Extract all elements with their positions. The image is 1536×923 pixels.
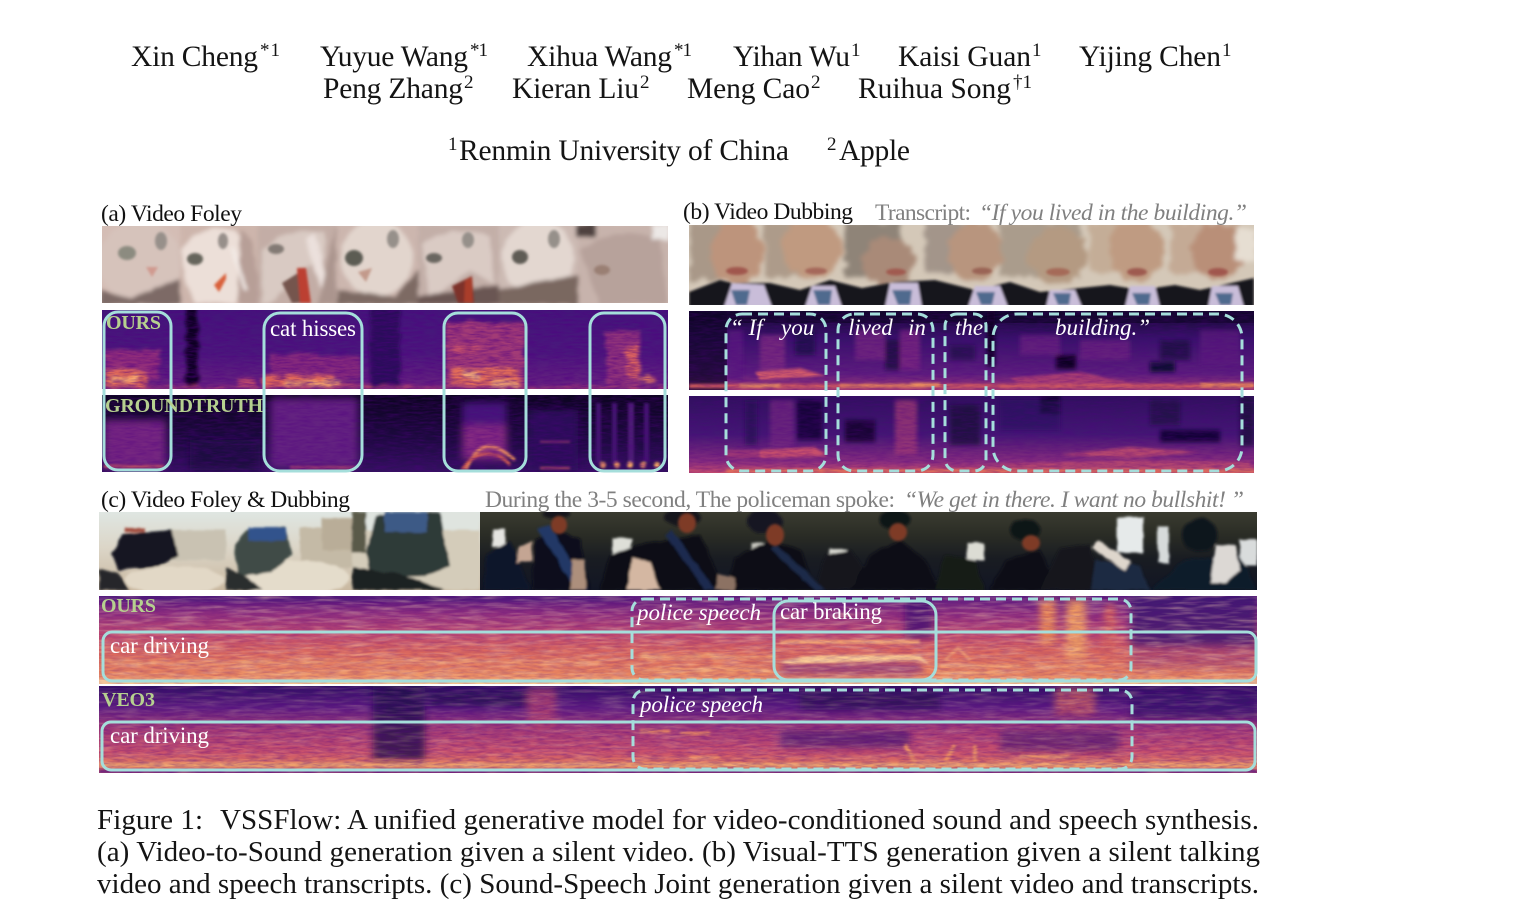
word labels (b): lived <box>848 315 893 340</box>
author row 1: Yijing Chen <box>1079 41 1221 73</box>
author row 1: Xihua Wang <box>527 41 672 73</box>
word labels (b): in <box>908 315 926 340</box>
labels row veo3 <box>102 689 763 748</box>
heading: foley and dubbing: (c) Video Foley & Dubbing <box>101 487 350 513</box>
affiliations: 2 <box>827 134 836 155</box>
word labels (b) <box>730 315 1150 340</box>
author row 1: Kaisi Guan <box>898 41 1031 73</box>
author row 2: 2 <box>640 72 650 93</box>
author row 1: *1 <box>470 40 488 61</box>
spectrogram: ground truth (a) <box>102 395 668 472</box>
author row 2: †1 <box>1013 72 1032 93</box>
author row 2 <box>323 72 1032 105</box>
author row 1: 1 <box>1222 40 1232 61</box>
transcript: “If you lived in the building.” <box>979 200 1247 226</box>
transcript: Transcript: <box>875 200 971 226</box>
labels row ours: car braking <box>780 599 882 624</box>
word labels (b): the <box>955 315 983 340</box>
figure caption: (a) Video-to-Sound generation given a silent video. (b) Visual-TTS generation given a silent talking <box>97 836 1260 868</box>
windows <box>492 530 506 547</box>
affiliations <box>448 134 910 167</box>
author row 1: Yihan Wu <box>733 41 850 73</box>
riders <box>484 540 530 590</box>
author row 1: 1 <box>851 40 860 61</box>
author row 1: Xin Cheng <box>131 41 258 73</box>
labels row ours: car driving <box>110 633 210 658</box>
labels row ours: OURS <box>101 595 156 617</box>
author list <box>131 40 1232 105</box>
helmets <box>542 512 571 520</box>
panel: (c) video foley and dubbing <box>99 487 1257 773</box>
word labels (b): building.” <box>1055 315 1150 340</box>
author row 1: 1 <box>1032 40 1042 61</box>
dashed word boxes (b) <box>726 314 1242 471</box>
scene description: During the 3-5 second, The policeman spoke: <box>485 487 895 513</box>
panel: (b) video dubbing <box>683 199 1256 473</box>
affiliations: Apple <box>839 135 910 167</box>
spectrogram: reference (b) <box>689 396 1254 473</box>
author row 2: 2 <box>811 72 820 93</box>
panel: (a) video foley <box>98 201 670 472</box>
heading: video foley: (a) Video Foley <box>101 201 242 227</box>
labels row veo3: car driving <box>110 723 210 748</box>
author row 1: *1 <box>260 40 280 61</box>
spectrogram: veo3 (c) <box>99 684 1257 773</box>
spectrogram: ours (b) <box>689 311 1254 390</box>
scene description: “We get in there. I want no bullshit! ” <box>904 487 1244 513</box>
author row 2: 2 <box>464 72 474 93</box>
figure caption: VSSFlow: A unified generative model for video-conditioned sound and speech synthesis. <box>220 804 1259 836</box>
rifles <box>538 525 588 590</box>
label: cat hisses: cat hisses <box>270 316 356 341</box>
word labels (b): “ If <box>730 315 766 340</box>
author row 2: Kieran Liu <box>512 73 639 105</box>
author row 1: *1 <box>674 40 692 61</box>
heading: video dubbing: (b) Video Dubbing <box>683 199 853 225</box>
figure caption <box>97 804 1260 900</box>
affiliations: 1 <box>448 134 458 155</box>
author row 2: Peng Zhang <box>323 73 463 105</box>
word labels (b): you <box>779 315 814 340</box>
video frames: cat <box>102 226 668 303</box>
labels row ours: police speech <box>635 600 761 625</box>
highlight boxes (c) <box>102 599 1256 770</box>
video frames: car and police <box>99 512 1257 590</box>
label: groundtruth: GROUNDTRUTH <box>105 395 263 417</box>
label: ours: OURS <box>106 312 161 334</box>
author row 1 <box>131 40 1232 73</box>
figure caption: Figure 1: <box>97 804 203 836</box>
author row 2: Meng Cao <box>687 73 810 105</box>
labels row veo3: police speech <box>638 692 763 717</box>
author row 2: Ruihua Song <box>858 73 1011 105</box>
scene description <box>485 487 1244 513</box>
labels row ours <box>101 595 882 658</box>
cat noses <box>146 267 158 277</box>
labels row veo3: VEO3 <box>102 689 155 711</box>
video frames: speaker <box>689 225 1254 305</box>
cat eyes <box>118 246 136 260</box>
blurred faces <box>551 513 1040 551</box>
cat mouths <box>214 273 226 292</box>
affiliations: Renmin University of China <box>459 135 789 167</box>
spectrogram: ours (a) <box>102 305 668 389</box>
author row 1: Yuyue Wang <box>320 41 468 73</box>
spectrogram: ours (c) <box>99 590 1257 684</box>
figure caption: video and speech transcripts. (c) Sound-Speech Joint generation given a silent video and transcripts. <box>97 868 1259 900</box>
arms <box>516 542 532 563</box>
highlight boxes (a) <box>104 312 665 471</box>
